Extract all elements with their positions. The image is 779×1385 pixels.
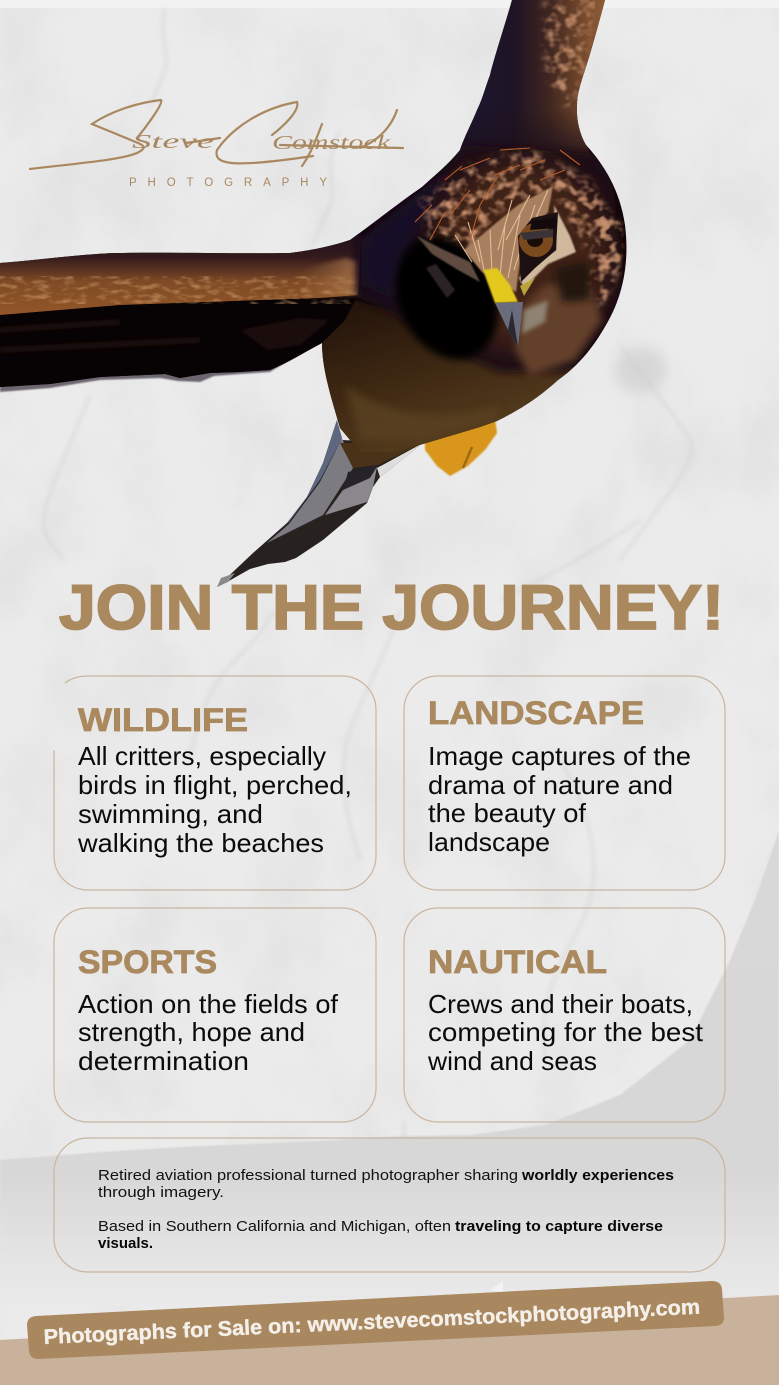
text: about line two: visuals. [98, 1236, 153, 1252]
title: JOIN THE JOURNEY! [59, 573, 724, 643]
text: about line one: Retired aviation professional turned photographer sharing [98, 1168, 518, 1184]
shoulder [356, 145, 625, 372]
brown cheek [515, 285, 602, 376]
text: about line one [98, 1168, 674, 1201]
PHOTOGRAPHY: PHOTOGRAPHY [129, 177, 327, 189]
banner text: Photographs for Sale on: www.stevecomstockphotography.com [43, 1296, 701, 1349]
head [393, 147, 626, 377]
text: landscape: drama of nature and [428, 770, 673, 800]
panel: sports [54, 908, 376, 1122]
logo: Steve Comstock signature [30, 100, 403, 189]
brow streak [417, 236, 480, 282]
text: landscape: the beauty of [428, 798, 587, 828]
bird body group [0, 0, 626, 452]
upper wing [458, 0, 605, 156]
tail feathers [217, 420, 423, 587]
lower wing [0, 295, 358, 392]
text: wildlife [77, 741, 352, 858]
text: nautical: Crews and their boats, [428, 989, 693, 1019]
text: sports: determination [78, 1046, 249, 1076]
heading: sports: SPORTS [78, 944, 217, 980]
heading: wildlife: WILDLIFE [78, 702, 248, 738]
beak [495, 302, 523, 347]
signature flourishes [30, 100, 403, 169]
signature text: Steve [132, 131, 214, 153]
panel: about [54, 1138, 725, 1272]
eye [519, 223, 553, 257]
text: about line one: through imagery. [98, 1185, 224, 1201]
lower wing pale edge [0, 340, 322, 392]
text: landscape: landscape [428, 827, 550, 857]
text: nautical: competing for the best [428, 1017, 704, 1047]
banner: website [27, 1281, 724, 1359]
heading: nautical: NAUTICAL [428, 944, 607, 980]
panel: wildlife [54, 676, 376, 890]
text: about line two: Based in Southern California and Michigan, often [98, 1219, 451, 1235]
text: about line one: worldly experiences [521, 1168, 674, 1184]
text: about line two [98, 1219, 663, 1252]
cere [483, 268, 518, 303]
hawk photo [0, 0, 779, 590]
talons [425, 418, 497, 476]
text: wildlife: All critters, especially [78, 741, 326, 771]
body [318, 300, 573, 452]
dark eye patch [518, 212, 558, 282]
panel: nautical [404, 908, 725, 1122]
text: about line two: traveling to capture diverse [455, 1219, 663, 1235]
text: wildlife: birds in flight, perched, [78, 770, 352, 800]
heading: landscape: LANDSCAPE [428, 695, 644, 731]
text: nautical [427, 989, 704, 1076]
text: wildlife: swimming, and [78, 799, 263, 829]
tan bottom band [0, 1295, 779, 1385]
text: wildlife: walking the beaches [77, 828, 324, 858]
text: landscape [428, 741, 691, 857]
panel: landscape [404, 676, 725, 890]
signature text: Comstock [272, 132, 392, 154]
text: landscape: Image captures of the [428, 741, 691, 771]
text: sports: strength, hope and [78, 1017, 305, 1047]
upper wing band [0, 232, 362, 315]
dark eye socket [393, 232, 502, 364]
text: sports: Action on the fields of [78, 989, 339, 1019]
text: sports [78, 989, 339, 1076]
faded hill and wing backdrop [0, 830, 779, 1305]
text: nautical: wind and seas [427, 1046, 597, 1076]
cream feathers [464, 186, 553, 292]
